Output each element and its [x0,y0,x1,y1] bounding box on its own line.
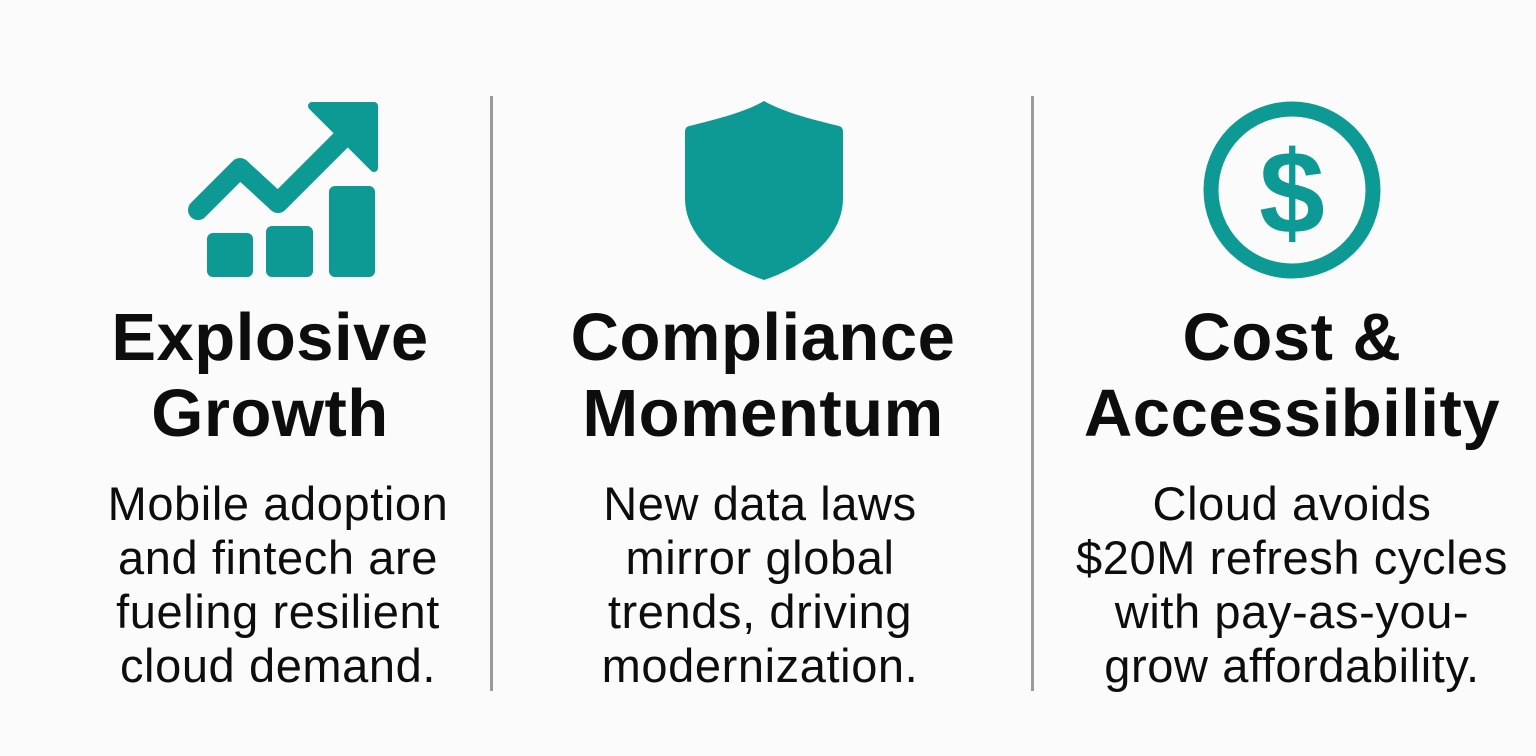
heading [111,300,429,451]
text block [108,477,448,692]
panel: cost & accessibility [1076,102,1508,692]
heading: Accessibility [1084,376,1500,451]
text block: and fintech are [118,531,438,584]
text block: $20M refresh cycles [1076,531,1508,584]
panel: explosive growth [108,102,448,692]
text block: mirror global [626,531,894,584]
heading: Momentum [582,376,944,451]
text block [602,477,918,692]
panel: compliance momentum [571,101,955,692]
text block: with pay-as-you- [1115,585,1469,638]
text block: Cloud avoids [1153,477,1431,530]
heading [571,300,955,451]
text block: New data laws [603,477,917,530]
heading: Cost & [1183,300,1401,375]
icon: dollar coin [1204,102,1380,278]
icon: growth chart [188,102,378,277]
icon: dollar coin: $ [1259,127,1325,259]
icon: shield [685,101,843,280]
text block: trends, driving [608,585,912,638]
text block: cloud demand. [120,639,436,692]
heading [1084,300,1500,451]
text block: Mobile adoption [108,477,448,530]
heading: Explosive [111,300,429,375]
text block: modernization. [602,639,918,692]
text block: fueling resilient [116,585,440,638]
heading: Compliance [571,300,955,375]
text block: grow affordability. [1104,639,1480,692]
text block [1076,477,1508,692]
heading: Growth [151,376,389,451]
